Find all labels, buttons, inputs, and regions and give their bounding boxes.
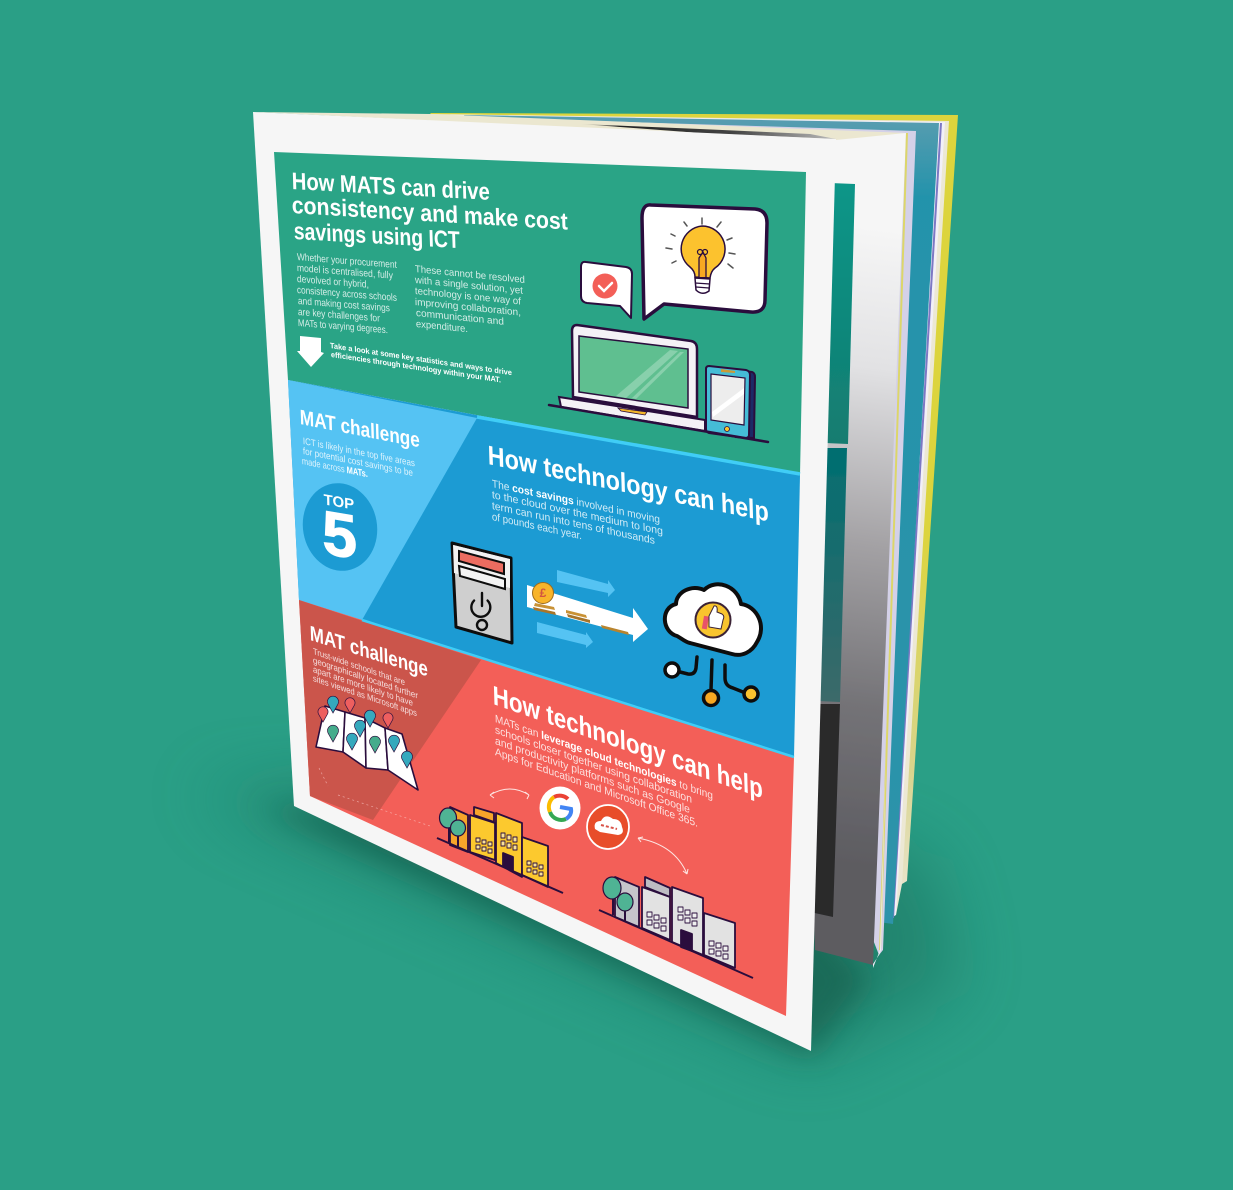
text: cloud technologies: MATs can leverage cloud technologies to bring: [495, 713, 713, 802]
intro text column 1: [297, 252, 397, 336]
teal map pins: [328, 696, 412, 768]
panel: green intro: [274, 152, 806, 475]
intro text column 1: are key challenges for: [298, 307, 381, 325]
text: cost savings: to the cloud over the medium to long: [492, 489, 663, 538]
intro text column 1: devolved or hybrid,: [297, 274, 369, 291]
yellow page line: [879, 133, 908, 950]
text: geographic challenge: geographically located further: [313, 655, 418, 701]
heading: MAT challenge: MAT challenge: [299, 406, 420, 452]
intro text column 2: improving collaboration,: [415, 297, 521, 319]
text: ICT challenge: ICT is likely in the top five areas: [303, 436, 415, 469]
section divider cyan: [362, 620, 794, 757]
intro call to action: Take a look at some key statistics and ways to drive: [330, 341, 513, 377]
intro text column 1: and making cost savings: [298, 296, 390, 314]
text: cost savings: term can run into tens of thousands: [492, 500, 656, 547]
inner teal block: [825, 183, 855, 444]
badge: top 5: [296, 477, 384, 577]
intro text column 2: technology is one way of: [415, 286, 521, 308]
cream sheet top edge: [253, 112, 906, 140]
icon: white savings arrow: [527, 585, 648, 642]
badge: top 5: 5: [322, 497, 358, 573]
text: cloud technologies: Apps for Education and Microsoft Office 365.: [495, 746, 698, 830]
back cover: yellow: [430, 113, 958, 884]
cream page edges: [430, 114, 949, 915]
front page white border: [253, 112, 836, 1051]
white sheets: [450, 114, 945, 924]
icon: down arrow: [297, 336, 324, 367]
page shadow wedge: [580, 124, 836, 139]
book: [253, 112, 958, 1051]
red map pins: [318, 698, 393, 728]
intro text column 2: [414, 264, 525, 335]
section divider cyan: [477, 417, 800, 474]
illustration: yellow school: [437, 807, 563, 893]
text: ICT challenge: for potential cost savings to be: [303, 446, 413, 479]
text: cloud technologies: and productivity platforms such as Google: [495, 735, 690, 816]
inner dark block: [810, 704, 840, 917]
icon: light blue arrow top: [557, 570, 615, 597]
grey page white edge: [873, 750, 886, 968]
intro text column 2: expenditure.: [416, 319, 468, 335]
icon: lightbulb speech bubble: [642, 205, 767, 319]
heading: MAT challenge: MAT challenge: [309, 621, 428, 681]
text: ICT challenge: made across MATs.: [302, 456, 368, 480]
icon: pound coin and coin stacks: [532, 582, 629, 635]
panel: blue technology background: [288, 380, 800, 757]
teal page: [464, 115, 939, 924]
intro title: consistency and make cost: [291, 192, 568, 236]
purple line: [892, 123, 942, 918]
intro text column 1: MATs to varying degrees.: [298, 318, 388, 336]
icon: curved arrow right: [638, 837, 688, 874]
icon: light blue arrow bottom: [537, 622, 593, 648]
back pages of the book: [253, 112, 958, 968]
icon: cloud with thumbs up: [665, 584, 761, 655]
icon: check speech bubble: [581, 262, 632, 318]
heading: How technology can help: How technology can help: [487, 439, 769, 528]
grey page: [600, 126, 906, 965]
heading: How technology can help: How technology can help: [492, 680, 763, 804]
icon: folded map with pins: [316, 696, 418, 790]
text: cost savings: The cost savings involved in moving: [492, 478, 660, 526]
icon: tablet: [706, 366, 755, 438]
icon: pound coin and coin stacks: £: [540, 586, 547, 600]
trees: [613, 892, 625, 922]
intro text column 2: These cannot be resolved: [415, 264, 525, 286]
trees: [449, 822, 458, 848]
intro title: How MATS can drive: [291, 168, 490, 206]
illustration: grey school: [599, 877, 753, 978]
panel: red technology background: [299, 600, 794, 1016]
inner deep teal block: [818, 448, 847, 702]
ground line under devices: [549, 405, 768, 442]
text: geographic challenge: [313, 646, 418, 718]
intro title: savings using ICT: [293, 218, 460, 254]
green map pins: [328, 725, 380, 753]
panel: MAT challenge light blue: [288, 380, 477, 620]
text: geographic challenge: Trust-wide schools that are: [313, 646, 405, 687]
intro text column 2: communication and: [416, 308, 504, 328]
badge: top 5: TOP: [323, 491, 354, 514]
intro text column 1: model is centralised, fully: [297, 263, 393, 282]
panel: MAT challenge dark red: [299, 600, 481, 820]
intro text column 1: consistency across schools: [297, 285, 397, 304]
dashed route line: [319, 768, 430, 826]
book shadow near: [258, 806, 870, 1056]
icon: cloud circuit connectors: [665, 657, 758, 706]
lavender page: [500, 118, 916, 955]
intro text column 1: Whether your procurement: [297, 252, 397, 271]
icon: Office cloud logo: [587, 805, 629, 849]
text: geographic challenge: apart are more likely to have: [313, 664, 413, 708]
book shadow wide: [190, 770, 960, 1060]
intro text column 2: with a single solution, yet: [414, 275, 523, 297]
inner page colour blocks: [810, 183, 855, 917]
icon: laptop: [559, 325, 705, 431]
text: cloud technologies: schools closer together using collaboration: [495, 724, 692, 806]
text: geographic challenge: sites viewed as Microsoft apps: [313, 673, 417, 718]
text: cost savings: of pounds each year.: [492, 511, 582, 542]
intro call to action: efficiencies through technology within your MAT.: [331, 350, 501, 384]
icon: Google logo: [540, 786, 580, 830]
intro title: [291, 168, 568, 254]
icon: server: [452, 543, 512, 643]
icon: curved arrow left: [490, 789, 529, 799]
